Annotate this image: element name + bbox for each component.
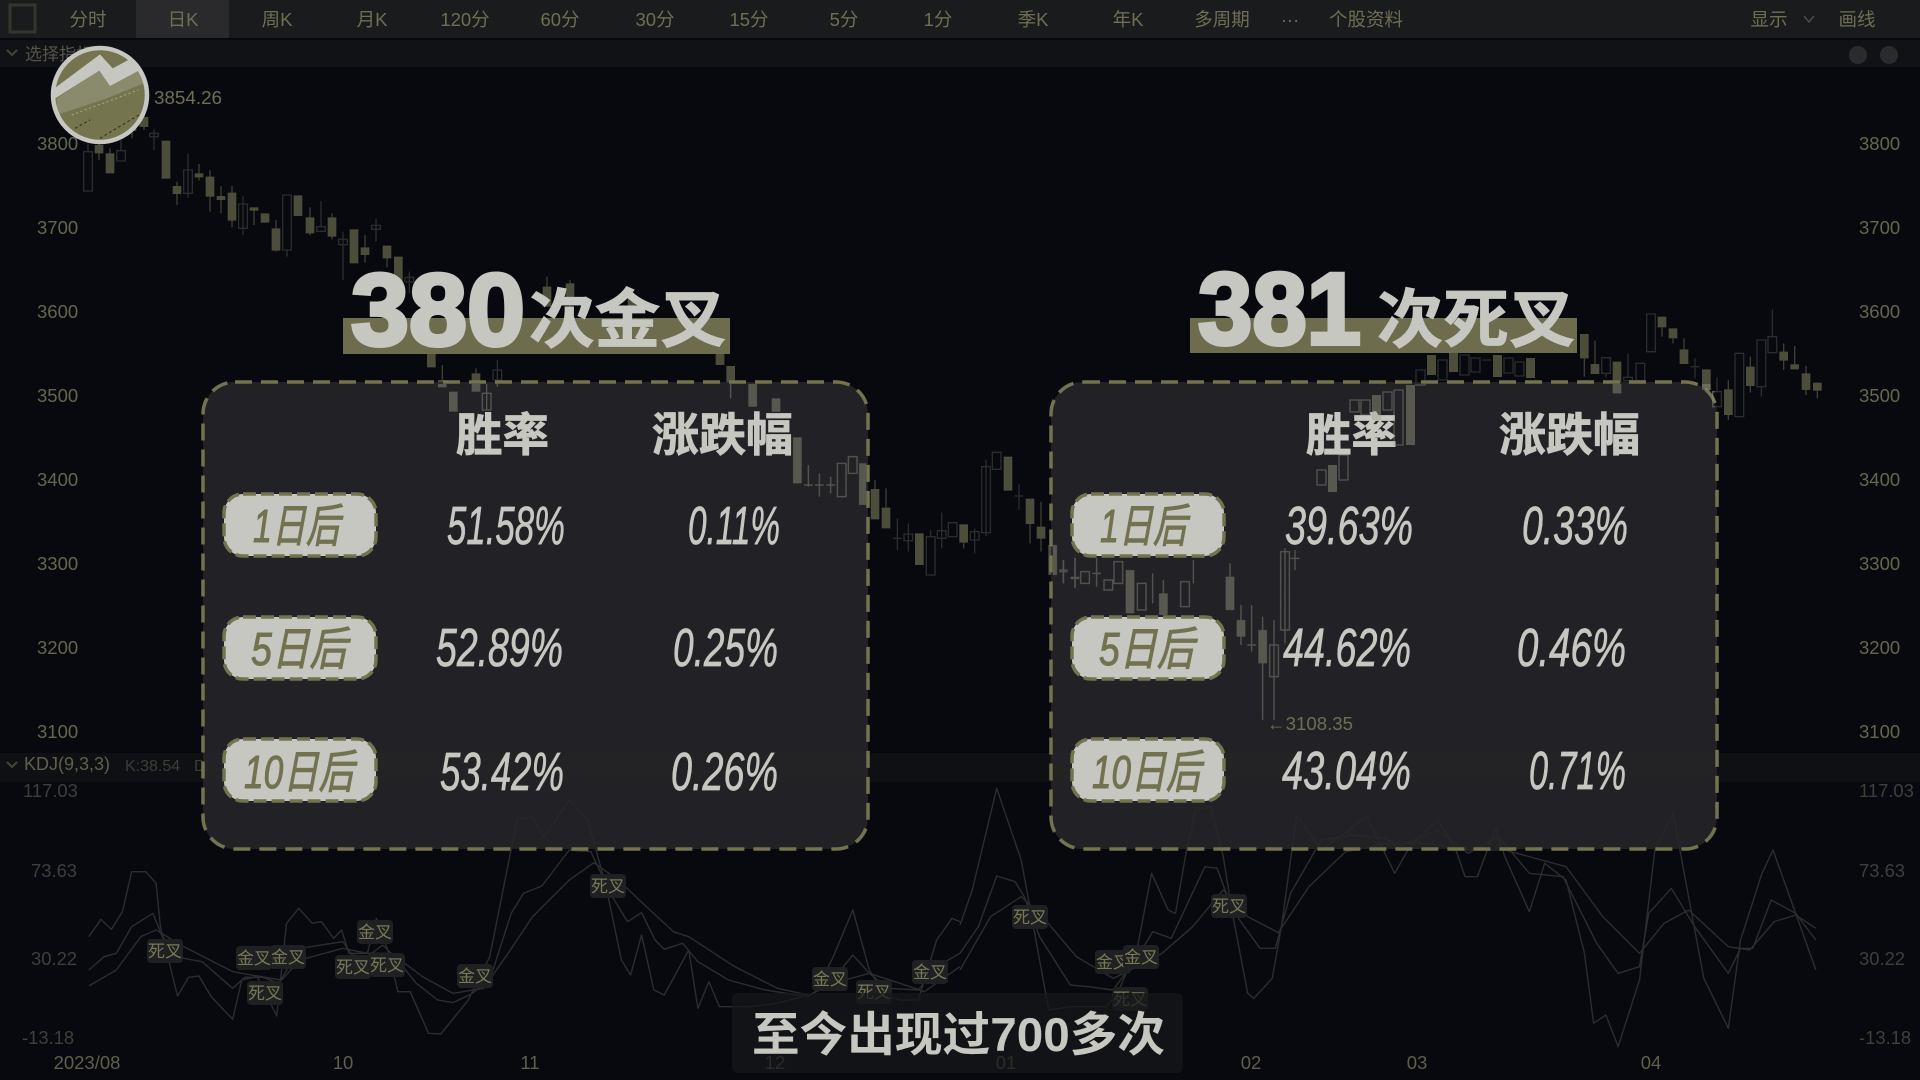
KDJ indicator lines (89, 788, 1816, 1047)
row: 1 day later (1072, 494, 1628, 556)
row: 10 days later: 10日后 (244, 746, 358, 798)
row: 1 day later: 51.58% (447, 496, 565, 556)
row: 5 days later: 0.25% (673, 618, 778, 678)
cross signal tags: 金叉 (237, 949, 271, 968)
row: 5 days later: 44.62% (1283, 618, 1411, 678)
KDJ axis labels (22, 780, 1914, 1048)
cross signal tags: 金叉 (458, 967, 492, 986)
KDJ axis labels: -13.18 (1859, 1027, 1911, 1048)
indicator selector bar (0, 40, 1920, 67)
KDJ header bar: K:38.54 (125, 758, 180, 775)
price axis right (1859, 133, 1900, 742)
heading: 380 golden crosses: 次金叉 (529, 284, 726, 356)
KDJ header bar (0, 753, 1920, 782)
cross signal tags: 金叉 (1096, 953, 1130, 972)
row: 1 day later: 39.63% (1285, 496, 1413, 556)
row: 5 days later: 0.46% (1517, 618, 1626, 678)
row: 5 days later: 5日后 (251, 623, 351, 675)
price axis left: 3500 (37, 385, 78, 406)
price axis right: 3500 (1859, 385, 1900, 406)
cross signal tags: 金叉 (813, 970, 847, 989)
row: 5 days later (224, 617, 778, 679)
row: 5 days later: 52.89% (436, 618, 563, 678)
cross signal tags: 死叉 (248, 984, 282, 1003)
time axis labels: 2023/08 (54, 1052, 120, 1073)
KDJ axis labels: 117.03 (23, 780, 78, 801)
time axis labels (54, 1052, 1661, 1073)
price axis right: 3400 (1859, 469, 1900, 490)
toolbar: chart period tabs: 显示 (1750, 9, 1788, 30)
toolbar: chart period tabs: 120分 (440, 9, 490, 30)
cross signal tags: 死叉 (591, 877, 625, 896)
price axis right: 3100 (1859, 721, 1900, 742)
time axis labels: 12 (765, 1052, 785, 1073)
toolbar: chart period tabs: 日K (168, 9, 199, 30)
indicator selector bar: 选择指标 (25, 45, 93, 64)
heading: 380 golden crosses (343, 253, 730, 367)
cross signal tags: 死叉 (336, 958, 370, 977)
KDJ axis labels: 30.22 (1859, 948, 1905, 969)
toolbar: chart period tabs: 5分 (830, 9, 858, 30)
KDJ axis labels: 73.63 (31, 860, 77, 881)
price axis left: 3400 (37, 469, 78, 490)
row: 10 days later: 0.26% (671, 742, 778, 802)
KDJ axis labels: 73.63 (1859, 860, 1905, 881)
time axis labels: 01 (996, 1052, 1016, 1073)
row: 1 day later (224, 494, 780, 556)
toolbar: chart period tabs: ··· (1281, 9, 1299, 30)
price axis right: 3700 (1859, 217, 1900, 238)
subtitle caption: 至今出现过700多次 (752, 1008, 1165, 1061)
cross signal tags: 死叉 (1113, 990, 1147, 1009)
cross signal tags: 金叉 (358, 923, 392, 942)
logo badge (50, 48, 147, 142)
cross signal tags: 金叉 (271, 948, 305, 967)
price axis left: 3700 (37, 217, 78, 238)
cross signal tags: 金叉 (1124, 948, 1158, 967)
cross signal tags (147, 874, 1247, 1011)
row: 10 days later: 10日后 (1092, 746, 1205, 798)
heading: 381 death crosses: 381 (1198, 252, 1361, 366)
column heading: change: 涨跌幅 (1499, 409, 1640, 461)
panel: death cross statistics (1051, 382, 1717, 849)
high price label: 3854.26 (154, 88, 222, 108)
time axis labels: 04 (1641, 1052, 1661, 1073)
cross signal tags: 金叉 (913, 963, 947, 982)
cross signal tags: 死叉 (148, 942, 182, 961)
price axis left: 3200 (37, 637, 78, 658)
panel: golden cross statistics (203, 382, 868, 849)
toolbar: chart period tabs: 周K (262, 9, 293, 30)
KDJ header bar: D: (194, 758, 210, 775)
time axis labels: 02 (1241, 1052, 1261, 1073)
price axis right: 3300 (1859, 553, 1900, 574)
toolbar: chart period tabs: 15分 (729, 9, 769, 30)
subtitle caption (732, 993, 1183, 1073)
row: 10 days later: 0.71% (1529, 741, 1626, 801)
price axis left: 3800 (37, 133, 78, 154)
price axis right: 3800 (1859, 133, 1900, 154)
heading: 381 death crosses: 次死叉 (1377, 284, 1575, 356)
time axis labels: 11 (520, 1052, 540, 1073)
KDJ axis labels: 117.03 (1859, 780, 1914, 801)
heading: 380 golden crosses: 380 (351, 253, 525, 367)
price axis left: 3600 (37, 301, 78, 322)
column heading: change: 涨跌幅 (652, 409, 793, 461)
row: 5 days later: 5日后 (1099, 623, 1198, 675)
toolbar: chart period tabs: 1分 (924, 9, 952, 30)
row: 5 days later (1072, 617, 1626, 679)
cross signal tags: 死叉 (857, 983, 891, 1002)
time axis labels: 10 (333, 1052, 353, 1073)
time axis labels: 03 (1407, 1052, 1427, 1073)
toolbar: chart period tabs: 月K (357, 9, 388, 30)
toolbar: chart period tabs (0, 0, 1920, 38)
toolbar: chart period tabs: 60分 (540, 9, 580, 30)
toolbar: chart period tabs: 季K (1018, 9, 1049, 30)
row: 1 day later: 0.33% (1522, 496, 1628, 556)
toolbar: chart period tabs: 分时 (69, 9, 107, 30)
row: 10 days later: 53.42% (440, 742, 564, 802)
row: 10 days later: 43.04% (1282, 741, 1411, 801)
row: 1 day later: 1日后 (1100, 500, 1191, 552)
price axis right: 3200 (1859, 637, 1900, 658)
toolbar: chart period tabs: 画线 (1838, 9, 1876, 30)
cross signal tags: 死叉 (1212, 897, 1246, 916)
row: 1 day later: 0.11% (688, 496, 780, 556)
KDJ axis labels: 30.22 (31, 948, 77, 969)
toolbar: chart period tabs: 年K (1113, 9, 1144, 30)
row: 10 days later (224, 739, 778, 802)
row: 10 days later (1072, 739, 1626, 801)
toolbar: chart period tabs: 个股资料 (1329, 9, 1403, 30)
cross signal tags: 死叉 (370, 956, 404, 975)
column heading: win rate: 胜率 (456, 409, 549, 461)
KDJ header bar: KDJ(9,3,3) (24, 754, 110, 774)
price axis left: 3100 (37, 721, 78, 742)
KDJ axis labels: -13.18 (22, 1027, 74, 1048)
row: 1 day later: 1日后 (253, 500, 344, 552)
price axis left: 3300 (37, 553, 78, 574)
price axis right: 3600 (1859, 301, 1900, 322)
candlestick chart (84, 112, 1822, 720)
price axis left (37, 133, 78, 742)
toolbar: chart period tabs: 多周期 (1194, 9, 1250, 30)
column heading: win rate: 胜率 (1306, 409, 1397, 461)
cross signal tags: 死叉 (1013, 908, 1047, 927)
low price label: ←3108.35 (1267, 714, 1353, 734)
heading: 381 death crosses (1190, 252, 1577, 366)
toolbar: chart period tabs: 30分 (635, 9, 675, 30)
